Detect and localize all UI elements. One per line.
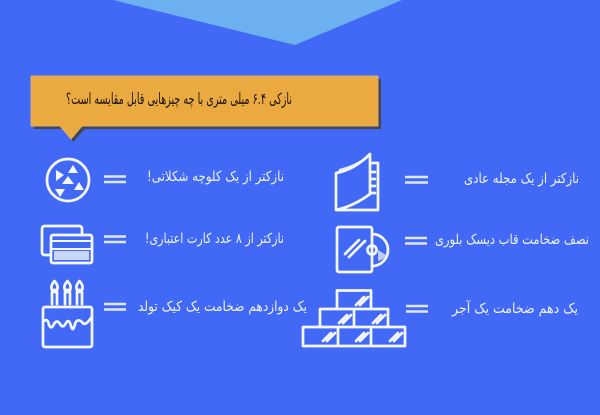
icon: cookie <box>47 159 89 201</box>
row: credit cards <box>42 226 284 263</box>
icon: CD case <box>337 227 388 272</box>
row: bricks <box>303 290 578 346</box>
callout shadow <box>34 79 381 142</box>
icon: credit cards <box>42 226 92 263</box>
icon: cake <box>43 281 92 347</box>
icon: bricks <box>303 290 405 346</box>
icon: magazine <box>336 154 378 210</box>
equals sign <box>405 177 428 182</box>
label: نازکتر از یک مجله عادی <box>464 171 579 187</box>
row: chocolate cookie <box>47 159 284 201</box>
label: یک دوازدهم ضخامت یک کیک تولد <box>138 299 307 315</box>
callout text: نازکی ۶.۴ میلی متری با چه چیزهایی قابل مقایسه است؟ <box>66 90 292 108</box>
row: birthday cake <box>43 281 307 347</box>
label: نازکتر از یک کلوچه شکلاتی! <box>147 169 284 185</box>
callout: question <box>31 76 381 142</box>
equals sign <box>104 304 126 310</box>
equals sign <box>406 306 428 312</box>
label: یک دهم ضخامت یک آجر <box>451 300 578 317</box>
top triangle banner <box>113 0 402 45</box>
equals sign <box>405 238 427 244</box>
callout box <box>31 76 378 139</box>
label: نازکتر از ۸ عدد کارت اعتباری! <box>145 231 284 247</box>
equals sign <box>104 176 126 182</box>
row: magazine <box>336 154 579 210</box>
row: CD case <box>337 227 589 272</box>
equals sign <box>104 236 126 242</box>
